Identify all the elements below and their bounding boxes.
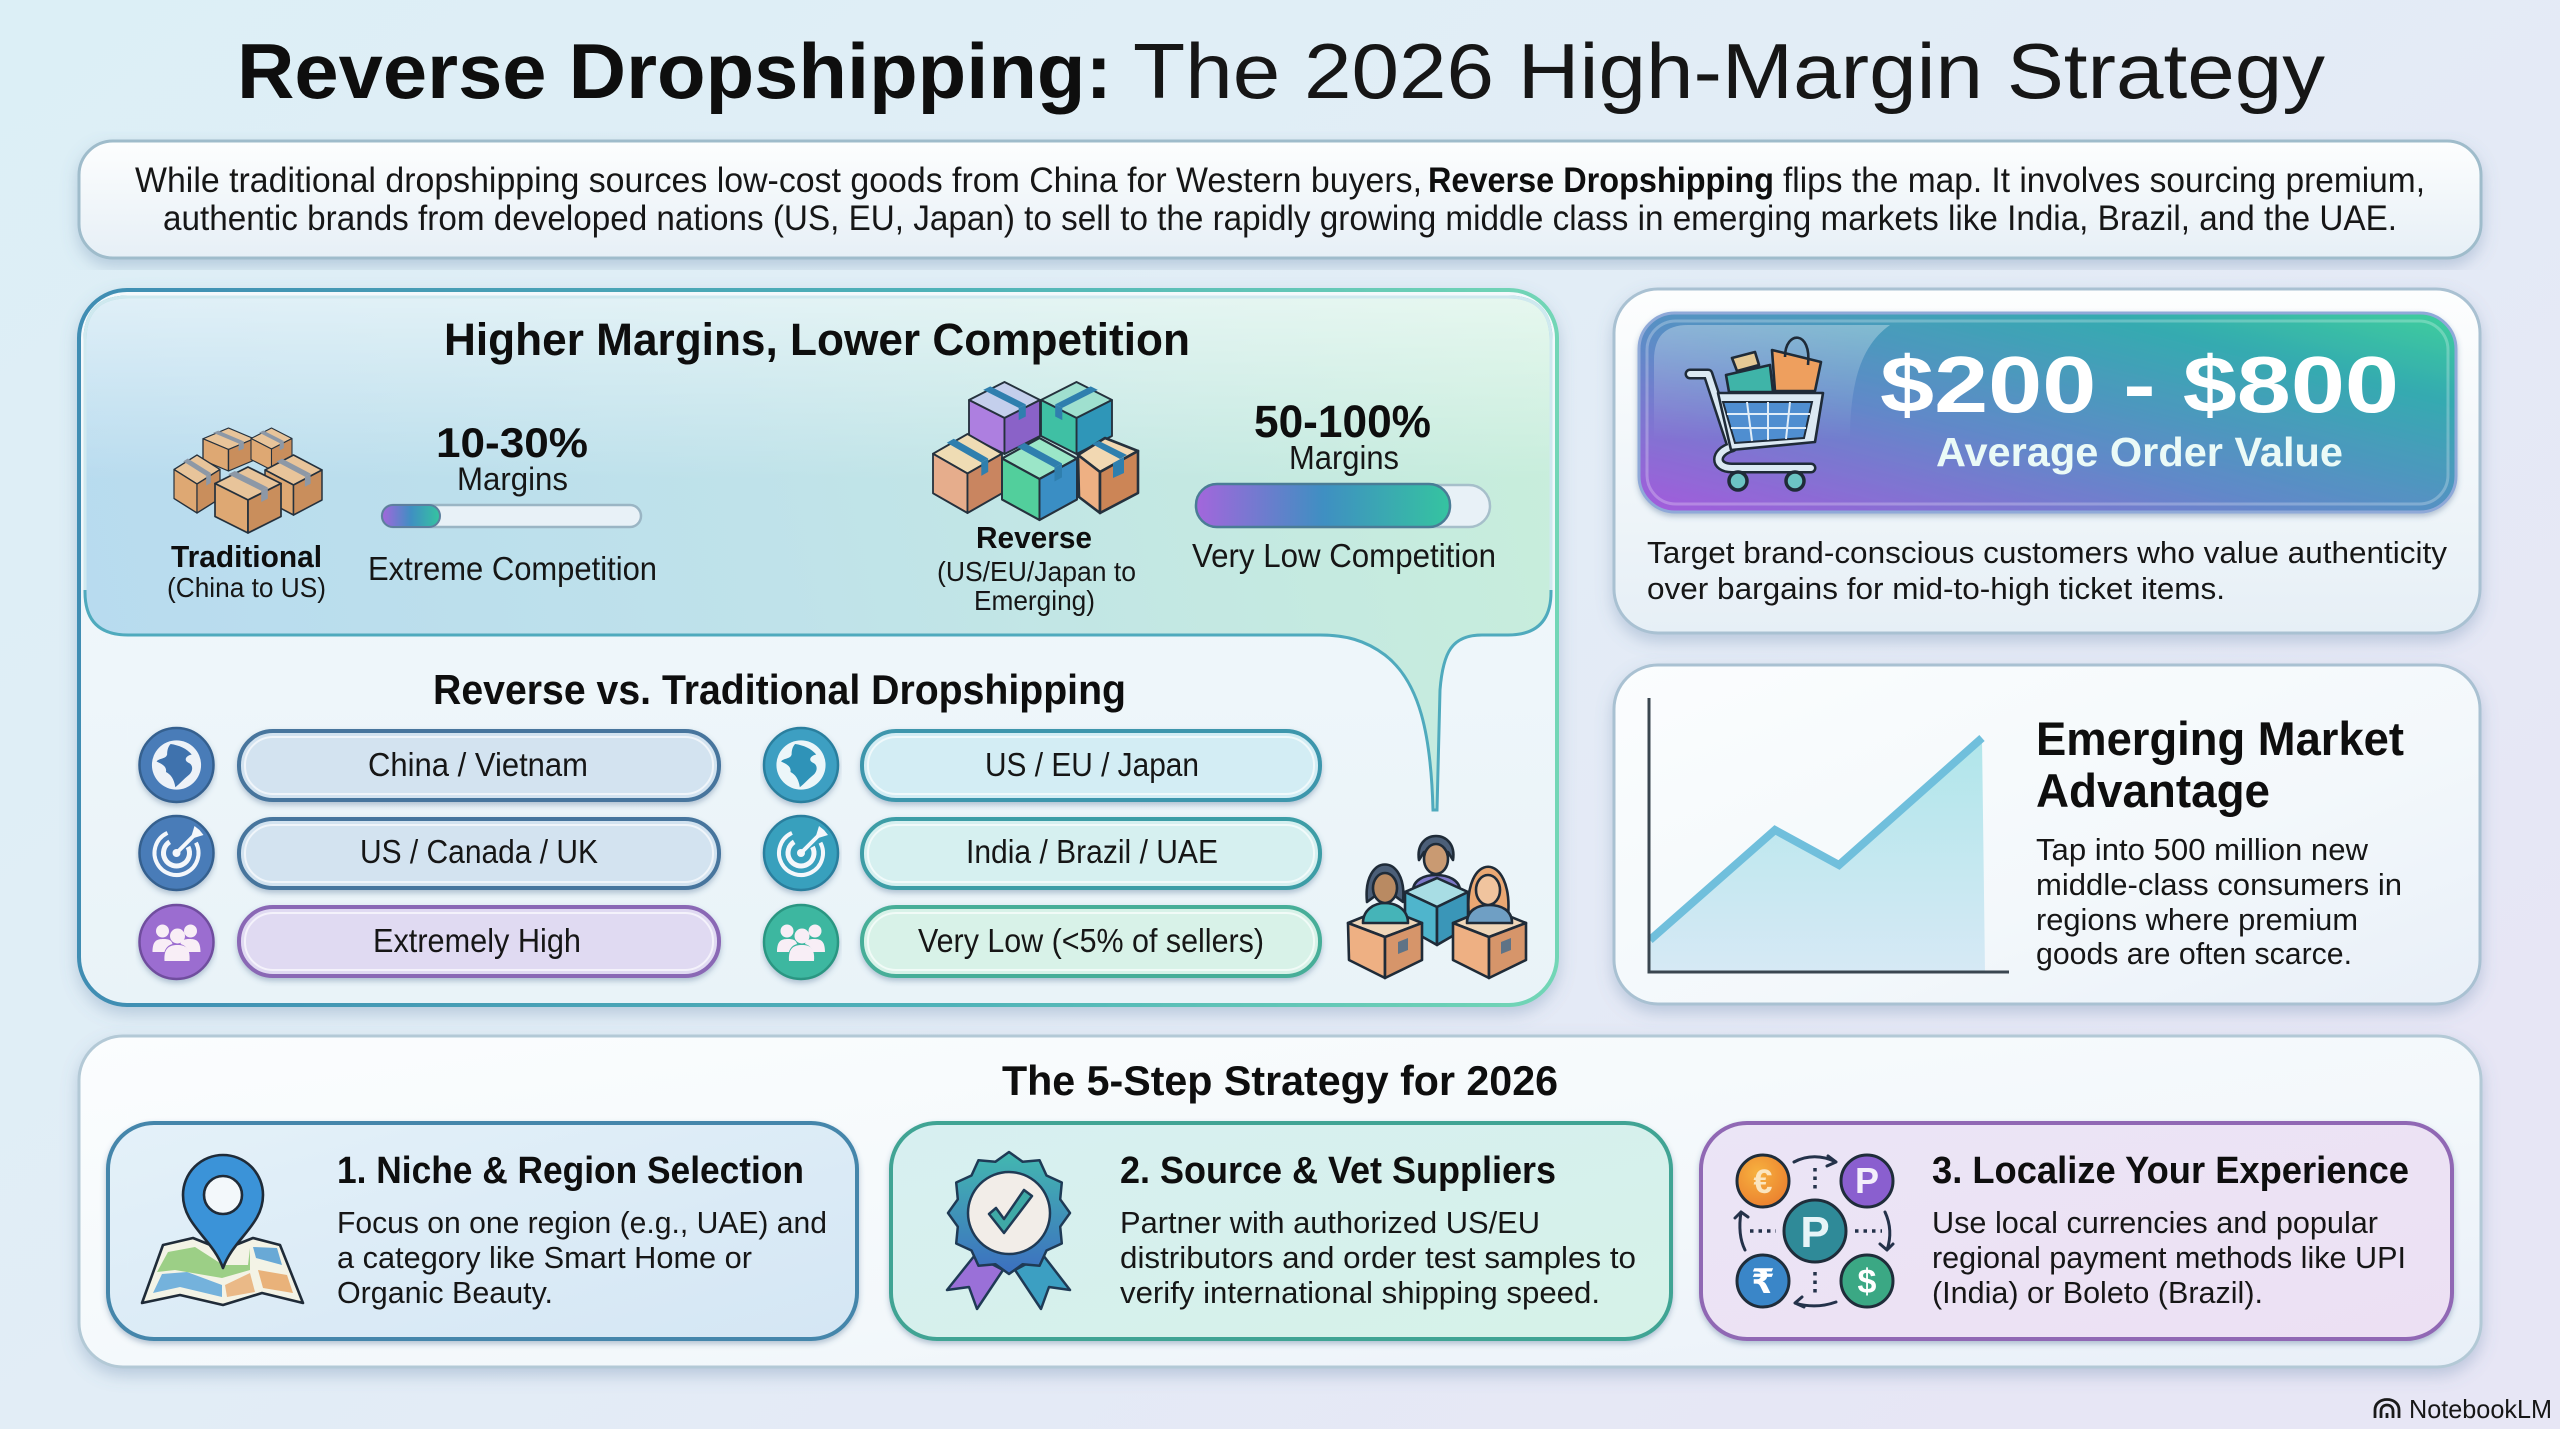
pill: market reverse — [862, 819, 1320, 888]
watermark: NotebookLM: NotebookLM — [2409, 1394, 2552, 1424]
icon: team reverse — [764, 905, 838, 979]
card text: Partner with authorized US/EU — [1120, 1205, 1540, 1240]
pill: competition reverse: Very Low (<5% of sellers) — [918, 922, 1264, 959]
icon: globe traditional — [140, 728, 214, 802]
card text: a category like Smart Home or — [337, 1240, 752, 1275]
intro text: flips the map. It involves sourcing premium, — [1783, 161, 2425, 200]
panel: intro — [79, 141, 2481, 258]
order value description — [1647, 535, 2447, 606]
heading: emerging market: Emerging Market — [2036, 712, 2404, 765]
pill: market reverse: India / Brazil / UAE — [966, 833, 1218, 870]
icon: team traditional — [140, 905, 214, 979]
card text: Use local currencies and popular — [1932, 1205, 2378, 1240]
reverse label: (US/EU/Japan to — [937, 556, 1136, 587]
card: source and vet — [891, 1123, 1671, 1339]
pill: sourcing traditional: China / Vietnam — [368, 746, 588, 783]
icon: local payment methods: P — [1800, 1208, 1830, 1257]
reverse label: Emerging) — [974, 585, 1095, 616]
card: niche and region — [108, 1123, 857, 1339]
card title: 2. Source & Vet Suppliers — [1120, 1150, 1556, 1192]
icon: local payment methods: P — [1855, 1160, 1879, 1201]
intro text: authentic brands from developed nations (US, EU, Japan) to sell to the rapidly growing middle class in emerging markets like India, Brazil, and the UAE. — [163, 199, 2397, 238]
icon: local payment methods: € — [1754, 1163, 1773, 1201]
panel: emerging market advantage — [1614, 665, 2480, 1004]
intro text: While traditional dropshipping sources low-cost goods from China for Western buyers, — [135, 161, 1422, 200]
reverse margins: Margins — [1289, 439, 1399, 476]
reverse competition label: Very Low Competition — [1192, 537, 1496, 574]
icon: traditional boxes — [174, 428, 322, 533]
pill: competition traditional — [239, 907, 719, 976]
card text: regional payment methods like UPI — [1932, 1240, 2406, 1275]
title — [237, 27, 2325, 115]
icon: map pin — [142, 1155, 303, 1305]
card title: 3. Localize Your Experience — [1932, 1150, 2409, 1192]
card text — [1120, 1205, 1636, 1310]
emerging market description: Tap into 500 million new — [2036, 832, 2369, 867]
icon: people with boxes — [1348, 836, 1526, 978]
panel: 5-step strategy — [79, 1036, 2481, 1367]
pill: market traditional: US / Canada / UK — [360, 833, 598, 870]
card text: Focus on one region (e.g., UAE) and — [337, 1205, 827, 1240]
traditional label: Traditional — [171, 539, 322, 574]
heading: emerging market: Advantage — [2036, 764, 2270, 817]
panel: average order value — [1614, 289, 2480, 633]
order value description: over bargains for mid-to-high ticket items. — [1647, 571, 2225, 606]
heading: reverse vs traditional: Reverse vs. Traditional Dropshipping — [433, 666, 1126, 713]
pill: sourcing traditional — [239, 731, 719, 800]
intro text: Reverse Dropshipping — [1428, 161, 1774, 200]
heading: higher margins: Higher Margins, Lower Competition — [444, 314, 1190, 365]
card: localize — [1701, 1123, 2452, 1339]
line chart — [1649, 698, 2009, 972]
icon: globe reverse — [764, 728, 838, 802]
emerging market description: middle-class consumers in — [2036, 867, 2402, 902]
traditional competition label: Extreme Competition — [368, 550, 657, 587]
pill: sourcing reverse — [862, 731, 1320, 800]
icon: shopping cart — [1690, 338, 1823, 490]
reverse margins: 50-100% — [1254, 396, 1431, 447]
emerging market description: regions where premium — [2036, 902, 2358, 937]
pill: sourcing reverse: US / EU / Japan — [985, 746, 1199, 783]
pill: competition reverse — [862, 907, 1320, 976]
panel: margins and comparison — [79, 290, 1557, 1005]
bar: reverse competition — [1196, 484, 1490, 527]
banner: order value — [1639, 313, 2456, 512]
card text: distributors and order test samples to — [1120, 1240, 1636, 1275]
icon: reverse boxes — [933, 382, 1138, 520]
traditional label — [167, 539, 326, 603]
speech bubble: higher margins — [85, 297, 1551, 810]
icon: target reverse — [764, 816, 838, 890]
bar: traditional competition — [382, 505, 641, 527]
value: $200 - $800 — [1880, 340, 2399, 429]
traditional label: (China to US) — [167, 572, 326, 603]
pill: competition traditional: Extremely High — [373, 922, 581, 959]
heading: 5-step strategy: The 5-Step Strategy for 2026 — [1002, 1057, 1558, 1104]
reverse label: Reverse — [976, 520, 1092, 555]
pill: market traditional — [239, 819, 719, 888]
title: The 2026 High-Margin Strategy — [1133, 27, 2325, 115]
card text: verify international shipping speed. — [1120, 1275, 1600, 1310]
heading: emerging market — [2036, 712, 2404, 817]
traditional margins: Margins — [457, 461, 568, 497]
value label: Average Order Value — [1936, 429, 2343, 475]
card text — [1932, 1205, 2406, 1310]
icon: local payment methods: ₹ — [1751, 1263, 1775, 1301]
emerging market description — [2036, 832, 2402, 971]
card title: 1. Niche & Region Selection — [337, 1150, 804, 1192]
emerging market description: goods are often scarce. — [2036, 936, 2352, 971]
intro text — [135, 161, 2425, 238]
icon: local payment methods — [1735, 1155, 1893, 1307]
card text: Organic Beauty. — [337, 1275, 553, 1310]
icon: target traditional — [140, 816, 214, 890]
comparison: reverse column — [764, 728, 1320, 979]
icon: local payment methods: $ — [1858, 1263, 1877, 1301]
card text — [337, 1205, 827, 1310]
order value description: Target brand-conscious customers who value authenticity — [1647, 535, 2447, 570]
traditional margins: 10-30% — [436, 419, 588, 466]
traditional margins — [436, 419, 588, 497]
icon: quality badge — [947, 1152, 1070, 1309]
comparison: traditional column — [140, 728, 719, 979]
title: Reverse Dropshipping: — [237, 27, 1112, 115]
reverse label — [937, 520, 1136, 616]
card text: (India) or Boleto (Brazil). — [1932, 1275, 2263, 1310]
reverse margins — [1254, 396, 1431, 476]
